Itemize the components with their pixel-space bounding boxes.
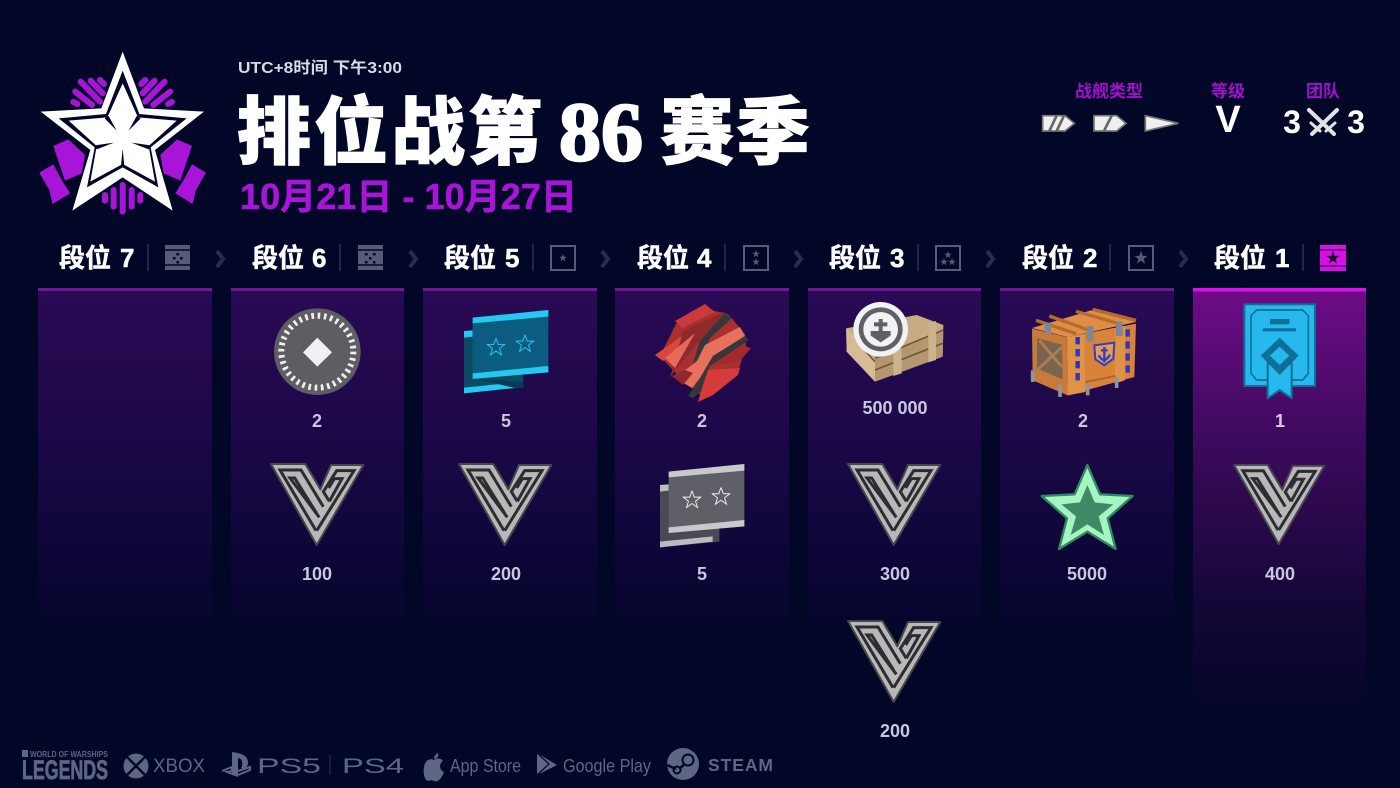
footer: steam: STEAM bbox=[708, 755, 773, 775]
tier 2 header: 段位 bbox=[1022, 243, 1074, 273]
tier 1 header bbox=[1214, 243, 1346, 273]
icon: green star bbox=[1042, 465, 1133, 549]
icon: grey flags bbox=[660, 464, 744, 547]
icon: blue flags bbox=[464, 310, 548, 393]
footer: game logo bbox=[22, 750, 109, 785]
footer: playstation: PS5 bbox=[257, 755, 321, 778]
icon: V currency bbox=[848, 464, 940, 545]
reward count: 200 bbox=[491, 564, 521, 584]
reward count: 5 bbox=[501, 411, 511, 431]
footer: google play bbox=[537, 753, 651, 776]
icon: orange crate bbox=[1032, 309, 1136, 397]
reward count: 300 bbox=[880, 564, 910, 584]
icon: wooden crate with credits bbox=[846, 302, 943, 382]
chevron bbox=[1180, 251, 1186, 267]
footer: steam bbox=[667, 748, 773, 780]
reward count: 200 bbox=[880, 721, 910, 741]
tier 6 header bbox=[252, 243, 383, 273]
panel: tier 5 bbox=[423, 288, 597, 650]
battle meta: team bbox=[1283, 82, 1365, 140]
battle meta: team: 团队 bbox=[1306, 82, 1340, 101]
chevron bbox=[602, 251, 608, 267]
icon: red camouflage bbox=[655, 304, 751, 402]
panel: tier 1 bbox=[1193, 288, 1366, 730]
tier 5 header: 5 bbox=[505, 243, 519, 273]
title: 赛季 bbox=[660, 91, 812, 174]
panel: tier 7 bbox=[38, 288, 212, 650]
tier 6 header: 段位 bbox=[252, 243, 304, 273]
panel: tier 6 bbox=[231, 288, 404, 650]
tier 1 header: 段位 bbox=[1214, 243, 1266, 273]
time note: UTC+8时间 下午3:00 bbox=[238, 58, 402, 77]
chevron bbox=[795, 251, 801, 267]
tier 3 header bbox=[829, 243, 960, 273]
reward count: 5 bbox=[697, 564, 707, 584]
tier 4 header: 4 bbox=[697, 243, 712, 273]
tier 7 header bbox=[59, 243, 190, 273]
battle meta: ship types bbox=[1043, 82, 1178, 131]
chevron bbox=[987, 251, 993, 267]
tier 4 header bbox=[637, 243, 768, 273]
tier 3 header: 段位 bbox=[829, 243, 881, 273]
battle meta: tier: V bbox=[1215, 99, 1241, 141]
footer: app store: App Store bbox=[450, 756, 521, 776]
chevron bbox=[217, 251, 223, 267]
panel: tier 4 bbox=[615, 288, 789, 650]
tier 7 header: 7 bbox=[120, 243, 134, 273]
footer: xbox bbox=[124, 754, 205, 778]
battle meta: team: 3 bbox=[1347, 104, 1365, 140]
reward count: 2 bbox=[312, 411, 322, 431]
footer: game logo: LEGENDS bbox=[22, 755, 108, 785]
reward count: 2 bbox=[1078, 411, 1088, 431]
date range: 10月21日 - 10月27日 bbox=[240, 176, 577, 217]
tier 5 header bbox=[444, 243, 575, 273]
icon: V currency bbox=[459, 464, 551, 545]
icon: V currency bbox=[271, 464, 363, 545]
title: 排位战第 bbox=[237, 91, 545, 174]
battle meta: team: 3 bbox=[1283, 104, 1301, 140]
chevron bbox=[410, 251, 416, 267]
reward count: 2 bbox=[697, 411, 707, 431]
icon: V currency bbox=[1234, 465, 1324, 544]
footer: xbox: XBOX bbox=[153, 755, 205, 777]
reward count: 5000 bbox=[1067, 564, 1107, 584]
battle meta: tier: 等级 bbox=[1211, 81, 1245, 101]
footer: playstation: PS4 bbox=[342, 755, 404, 778]
reward count: 100 bbox=[302, 564, 332, 584]
battle meta: tier bbox=[1211, 81, 1245, 141]
tier 7 header: 段位 bbox=[59, 243, 111, 273]
tier 1 header: 1 bbox=[1275, 243, 1289, 273]
tier 2 header bbox=[1022, 243, 1153, 273]
logo: ranked star emblem bbox=[39, 52, 206, 212]
battle meta: ship types: 战舰类型 bbox=[1075, 82, 1143, 101]
footer: playstation bbox=[222, 752, 404, 778]
reward count: 1 bbox=[1275, 411, 1285, 431]
icon: V currency bbox=[848, 621, 940, 702]
tier 4 header: 段位 bbox=[637, 243, 689, 273]
tier 6 header: 6 bbox=[312, 243, 326, 273]
tier 5 header: 段位 bbox=[444, 243, 496, 273]
icon: grey signal disc bbox=[274, 308, 361, 395]
title: 86 bbox=[559, 86, 643, 179]
panel: tier 3 bbox=[808, 288, 981, 741]
footer: game logo: WORLD OF WARSHIPS bbox=[30, 750, 109, 759]
reward count: 500 000 bbox=[862, 398, 928, 418]
tier 3 header: 3 bbox=[890, 243, 904, 273]
icon: blue certificate bbox=[1244, 304, 1315, 398]
reward count: 400 bbox=[1265, 564, 1295, 584]
tier 2 header: 2 bbox=[1083, 243, 1097, 273]
panel: tier 2 bbox=[1000, 288, 1174, 650]
footer: google play: Google Play bbox=[563, 756, 651, 776]
footer: app store bbox=[424, 753, 521, 781]
